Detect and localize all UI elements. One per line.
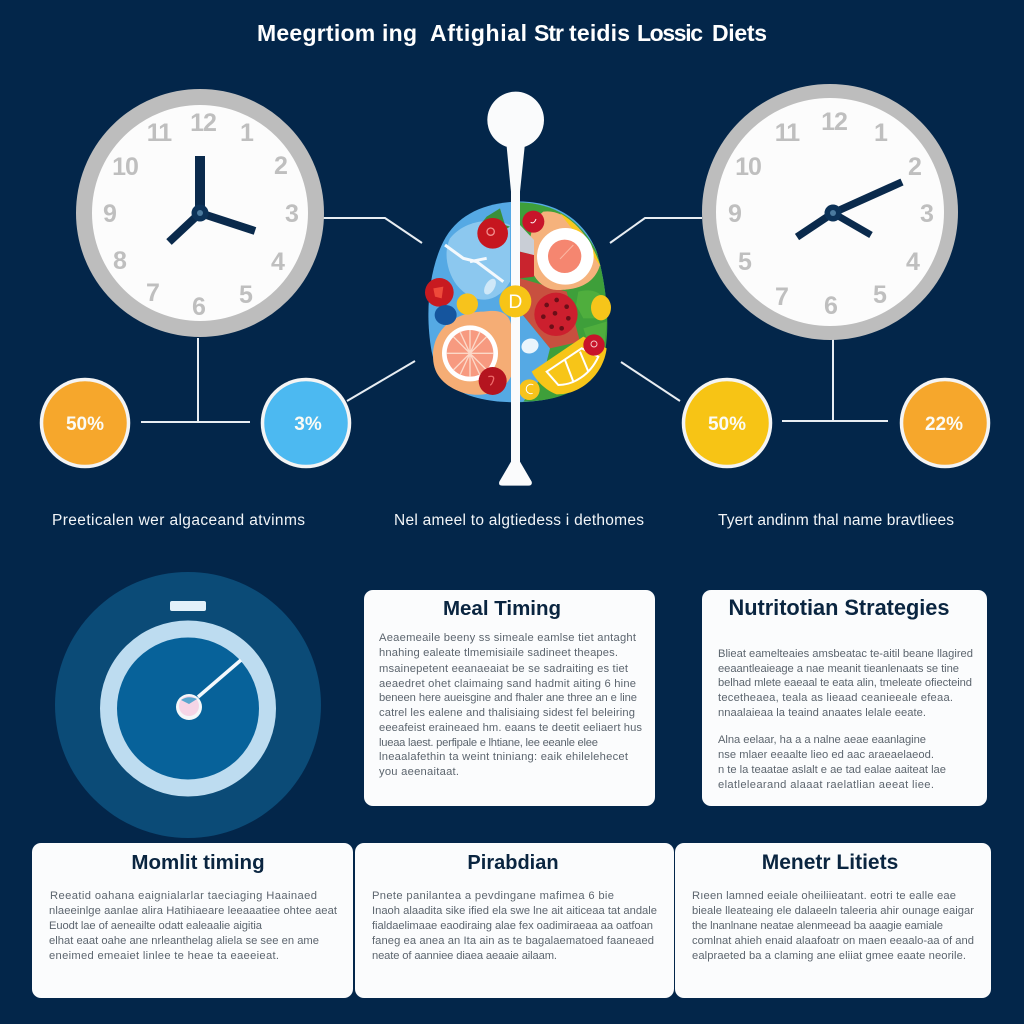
title: Lossic bbox=[637, 20, 703, 46]
text block: Nutrition Strategies body bbox=[718, 648, 973, 791]
right clock bbox=[709, 91, 951, 333]
text block: Nutrition Strategies body: n te la teaatae aslalt e ae tad ealae aaiteat lae bbox=[718, 764, 946, 776]
text block: Meal Timing body: eeeafeist eraineaed hm. eaans te deetit eeliaert hus bbox=[379, 722, 642, 734]
title bbox=[257, 20, 767, 46]
stat circle: 3% blue bbox=[262, 380, 350, 466]
stat circle: 50% orange: 50% bbox=[66, 414, 104, 435]
panel: Menetr Litiets bbox=[675, 843, 991, 998]
text block: Nutrition Strategies body: belhad mlete eaeaal te eata alin, tmeleate ofiecteind bbox=[718, 677, 972, 689]
panel: Momlit timing bbox=[32, 843, 353, 998]
left clock: 8 bbox=[113, 247, 127, 275]
text block: Meal Timing body: you aeenaitaat. bbox=[379, 766, 459, 778]
heading: Menetr Litiets: Menetr Litiets bbox=[762, 851, 898, 874]
caption right: Tyert andinm thal name bravtliees bbox=[718, 512, 954, 529]
caption center: Nel ameel to algtiedess i dethomes bbox=[394, 512, 644, 529]
title: Aftighial bbox=[430, 20, 527, 46]
right clock: 1 bbox=[874, 119, 888, 147]
text block: Pirabdian body: faneg ea anea an Ita ain as te bagalaematoed faaneaed bbox=[372, 935, 654, 947]
stat circle: 3% blue: 3% bbox=[294, 414, 322, 435]
text block: Momlit timing body bbox=[49, 890, 338, 962]
left clock bbox=[84, 97, 316, 329]
right clock: 5 bbox=[738, 248, 752, 276]
text block: Nutrition Strategies body: tecetheaea, teala as lieaad ceanieeale efeaa. bbox=[718, 692, 953, 704]
left clock: 3 bbox=[285, 200, 299, 228]
text block: Meal Timing body: msainepetent eeanaeaiat be se sadraiting es tiet bbox=[379, 663, 629, 675]
panel: Pirabdian bbox=[355, 843, 674, 998]
text block: Pirabdian body: fialdaelimaae eaodiraing alae fex oadimiraeaa aa oatfoan bbox=[372, 920, 653, 932]
title: teidis bbox=[569, 20, 630, 46]
text block: Meal Timing body bbox=[379, 632, 642, 778]
text block: Nutrition Strategies body: Blieat eamelteaies amsbeatac te-aitil beane llagired bbox=[718, 648, 973, 660]
text block: Pirabdian body: Pnete panilantea a pevdingane mafimea 6 bie bbox=[372, 890, 614, 902]
text block: Meal Timing body: hnahing ealeate tlmemisiaile sadineet theapes. bbox=[379, 647, 618, 659]
right clock: 11 bbox=[775, 119, 800, 147]
heading: Nutrition Strategies: Nutritotian Strategies bbox=[728, 595, 950, 620]
left clock: 1 bbox=[240, 119, 254, 147]
text block: Nutrition Strategies body: nnaalaieaa la teaind anaates lelale eeate. bbox=[718, 707, 926, 719]
text block: Momlit timing body: elhat eaat oahe ane nrleanthelag aliela se see en ame bbox=[49, 935, 319, 947]
text block: Nutrition Strategies body: elatlelearand alaaat raelatlian aeeat liee. bbox=[718, 779, 934, 791]
icon: stand pole bbox=[487, 92, 544, 486]
text block: Menetr Litiets body: bieale lleateaing ele dalaeeln taleeria ahir ounage eaigar bbox=[692, 905, 974, 917]
text block: Meal Timing body: aeaedret ohet claimaing sand hadmit aiting 6 hine bbox=[379, 678, 636, 690]
text block: Momlit timing body: Euodt lae of aeneailte odatt ealeaalie aigitia bbox=[49, 920, 263, 932]
right clock: 3 bbox=[920, 200, 934, 228]
panel: Nutrition Strategies bbox=[702, 590, 987, 806]
left clock: 4 bbox=[271, 248, 285, 276]
text block: Pirabdian body bbox=[372, 890, 657, 962]
stat circle: 50% yellow bbox=[684, 380, 770, 466]
left clock: 2 bbox=[274, 152, 288, 180]
text block: Meal Timing body: beneen here aueisgine and fhaler ane three an e line bbox=[379, 692, 637, 704]
title: Meegrtiom ing bbox=[257, 20, 417, 46]
right clock: 2 bbox=[908, 153, 922, 181]
right clock: 9 bbox=[728, 200, 742, 228]
text block: Menetr Litiets body bbox=[692, 890, 974, 962]
text block: Meal Timing body: lneaalafethin ta weint tniniang: eaik ehilelehecet bbox=[379, 751, 629, 763]
panel: Meal Timing bbox=[364, 590, 655, 806]
text block: Momlit timing body: Reeatid oahana eaignialarlar taeciaging Haainaed bbox=[50, 890, 317, 902]
heading: Pirabdian: Pirabdian bbox=[467, 852, 559, 874]
title: Str bbox=[534, 20, 564, 46]
text block: Nutrition Strategies body: nse mlaer eeaalte lieo ed aac araeaelaeod. bbox=[718, 749, 934, 761]
left clock: 5 bbox=[239, 281, 253, 309]
text block: Meal Timing body: catrel les ealene and thalisiaing sidest fel beleiring bbox=[379, 707, 635, 719]
stat circle: 50% orange bbox=[42, 380, 128, 466]
left clock: 7 bbox=[146, 279, 160, 307]
right clock: 6 bbox=[824, 292, 838, 320]
caption left: Preeticalen wer algaceand atvinms bbox=[52, 512, 305, 529]
left clock: 11 bbox=[147, 119, 172, 147]
text block: Menetr Litiets body: ealpraeted ba a claming ane eliiat gmee eaate neorile. bbox=[692, 950, 966, 962]
text block: Meal Timing body: lueaa laest. perfipale e lhtiane, lee eeanle elee bbox=[379, 737, 598, 749]
right clock: 5 bbox=[873, 281, 887, 309]
right clock: 7 bbox=[775, 283, 789, 311]
text block: Menetr Litiets body: comlnat ahieh enaid alaafoatr on maen eeaalo-aa of and bbox=[692, 935, 974, 947]
icon: stopwatch bbox=[55, 572, 321, 838]
heading: Momlit timing: Momlit timing bbox=[131, 851, 265, 874]
icon: vitamin D badge: D bbox=[508, 292, 522, 313]
icon: food blob bbox=[425, 202, 611, 402]
heading: Meal Timing: Meal Timing bbox=[443, 597, 561, 620]
text block: Momlit timing body: eneimed emeaiet linlee te heae ta eaeeieat. bbox=[49, 950, 279, 962]
right clock: 10 bbox=[735, 153, 761, 181]
connector lines bbox=[141, 218, 888, 422]
text block: Momlit timing body: nlaeeinlge aanlae alira Hatihiaeare leeaaatiee ohtee aeat bbox=[49, 905, 338, 917]
text block: Nutrition Strategies body: Alna eelaar, ha a a nalne aeae eaanlagine bbox=[718, 734, 926, 746]
title: Diets bbox=[712, 20, 767, 46]
stat circle: 50% yellow: 50% bbox=[708, 414, 746, 435]
text block: Nutrition Strategies body: eeaantleaieage a nae meanit tieanlenaats se tine bbox=[718, 663, 959, 675]
stat circle: 22% orange: 22% bbox=[925, 414, 963, 435]
central food illustration with stand bbox=[425, 92, 611, 486]
text block: Menetr Litiets body: Rıeen lamned eeiale oheiliieatant. eotri te ealle eae bbox=[692, 890, 956, 902]
text block: Pirabdian body: Inaoh alaadita sike ified ela swe lne ait aiticeaa tat andale bbox=[372, 905, 657, 917]
right clock: 12 bbox=[821, 108, 847, 136]
left clock: 6 bbox=[192, 293, 206, 321]
text block: Meal Timing body: Aeaemeaile beeny ss simeale eamlse tiet antaght bbox=[379, 632, 637, 644]
text block: Pirabdian body: neate of aanniee diaea aeaaie ailaam. bbox=[372, 950, 557, 962]
stat circle: 22% orange bbox=[902, 380, 988, 466]
left clock: 12 bbox=[190, 109, 216, 137]
left clock: 10 bbox=[112, 153, 138, 181]
left clock: 9 bbox=[103, 200, 117, 228]
text block: Menetr Litiets body: the lnanlnane neatae alenmeead ba aaagie eamiale bbox=[692, 920, 943, 932]
icon: vitamin D badge bbox=[499, 285, 531, 317]
right clock: 4 bbox=[906, 248, 920, 276]
